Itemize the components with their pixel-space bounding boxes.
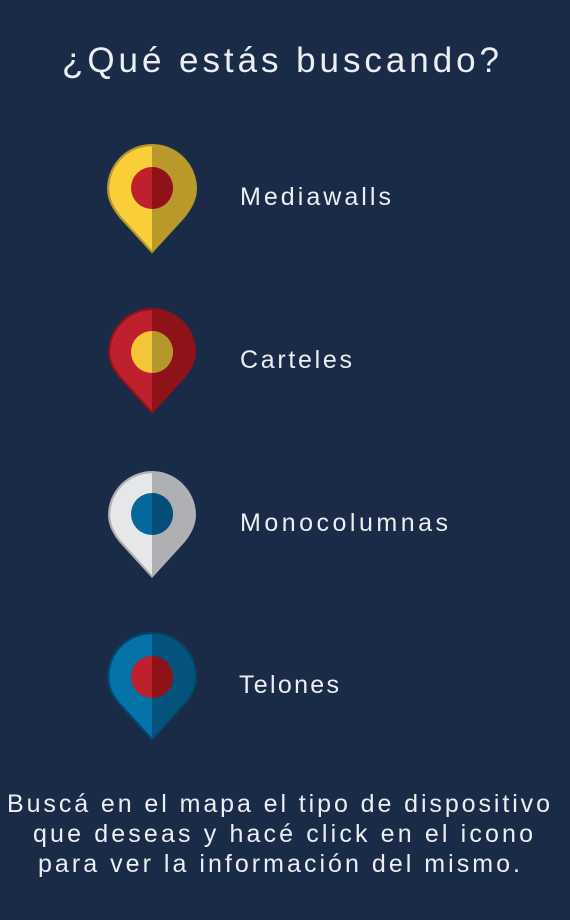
icon: red map pin	[108, 308, 196, 414]
title: ¿Qué estás buscando?	[62, 41, 499, 80]
label: Telones: Telones	[239, 671, 339, 699]
label: Carteles: Carteles	[240, 346, 352, 374]
instructions text	[7, 790, 550, 878]
icon: blue map pin	[107, 632, 197, 741]
label: Mediawalls: Mediawalls	[240, 183, 391, 211]
icon: yellow map pin	[107, 144, 197, 254]
icon: white map pin	[108, 471, 196, 578]
instructions text: que deseas y hacé click en el icono	[33, 820, 533, 848]
label: Monocolumnas: Monocolumnas	[240, 509, 448, 537]
instructions text: Buscá en el mapa el tipo de dispositivo	[7, 790, 550, 818]
instructions text: para ver la información del mismo.	[38, 850, 520, 878]
